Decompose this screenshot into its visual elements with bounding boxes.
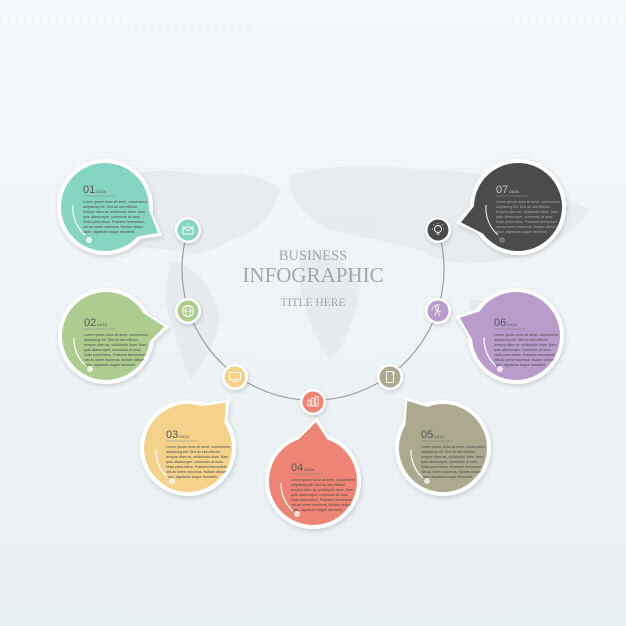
bubble 07: 07 xyxy=(496,184,508,196)
bubble 04: Nulla porta tellus. Praesent fermentum xyxy=(291,498,352,502)
icon 04: bar chart xyxy=(300,389,326,415)
arc connector xyxy=(182,230,444,400)
bubble 03: Lorem ipsum dolor sit amet, consectetur xyxy=(166,445,231,449)
bubble 06: adipiscing elit. Sed do sint efficitur xyxy=(494,338,549,342)
bubble 03: Nulla porta tellus. Praesent fermentum xyxy=(166,465,227,469)
title: TITLE HERE xyxy=(281,297,345,309)
bubble 01: DATA xyxy=(96,189,106,194)
bubble 03: adipiscing elit. Sed do sint efficitur xyxy=(166,450,221,454)
bubble 02: quis ullamcorper, commodo at nunc. xyxy=(84,348,142,352)
bubble 04: DATA xyxy=(304,467,314,472)
bubble 03 xyxy=(121,368,265,515)
bubble 02: Nulla porta tellus. Praesent fermentum xyxy=(84,353,145,357)
bubble 01: Lorem ipsum dolor sit amet, consectetur xyxy=(83,200,148,204)
bubble 05: quis ullamcorper, commodo at nunc. xyxy=(421,460,479,464)
bubble 07: tempus diam ac, sollicitudin diam. Nam xyxy=(496,210,558,214)
icon 01: envelope xyxy=(175,217,201,243)
bubble 05: Nulla porta tellus. Praesent fermentum xyxy=(421,465,482,469)
bubble 04: tempus diam ac, sollicitudin diam. Nam xyxy=(291,488,353,492)
bubble 02: nisl ac lorem maximus. Nullam dictum xyxy=(84,358,144,362)
bubble 02: tempus diam ac, sollicitudin diam. Nam xyxy=(84,343,146,347)
bubble 02: DATA xyxy=(97,322,107,327)
icon 07: light bulb xyxy=(425,217,451,243)
icon 06: person xyxy=(425,298,451,324)
world map background xyxy=(60,166,590,380)
bubble 05: diam, dignissim augue hendrerit. xyxy=(421,475,473,479)
bubble 06: Lorem ipsum dolor sit amet, consectetur xyxy=(494,333,559,337)
bubble 06: tempus diam ac, sollicitudin diam. Nam xyxy=(494,343,556,347)
bubble 02: Lorem ipsum dolor sit amet, consectetur xyxy=(84,333,149,337)
bubble 04: quis ullamcorper, commodo at nunc. xyxy=(291,493,349,497)
bubble 01: tempus diam ac, sollicitudin diam. Nam xyxy=(83,210,145,214)
bubble 03: diam, dignissim augue hendrerit. xyxy=(166,475,218,479)
bubble 04: Lorem ipsum dolor sit amet, consectetur xyxy=(291,478,356,482)
bubble 01: diam, dignissim augue hendrerit. xyxy=(83,230,135,234)
bubble 07: Nulla porta tellus. Praesent fermentum xyxy=(496,220,557,224)
bubble 02: 02 xyxy=(84,317,96,329)
bubble 03: 03 xyxy=(166,429,178,441)
bubble 03: DATA xyxy=(179,434,189,439)
bubble 07: diam, dignissim augue hendrerit. xyxy=(496,230,548,234)
title: INFOGRAPHIC xyxy=(242,263,384,287)
icon 03: monitor xyxy=(222,364,248,390)
title xyxy=(242,248,384,309)
bubble 02: adipiscing elit. Sed do sint efficitur xyxy=(84,338,139,342)
bubble 07: nisl ac lorem maximus. Nullam dictum xyxy=(496,225,556,229)
bubble 01: adipiscing elit. Sed do sint efficitur xyxy=(83,205,138,209)
bubble 07 xyxy=(442,147,578,272)
icon 02: globe xyxy=(175,298,201,324)
bubble 07: adipiscing elit. Sed do sint efficitur xyxy=(496,205,551,209)
title: BUSINESS xyxy=(279,248,347,264)
bubble 03: quis ullamcorper, commodo at nunc. xyxy=(166,460,224,464)
bubble 05: 05 xyxy=(421,429,433,441)
bubble 05: tempus diam ac, sollicitudin diam. Nam xyxy=(421,455,483,459)
bubble 04 xyxy=(265,417,361,529)
bubble 04: diam, dignissim augue hendrerit. xyxy=(291,508,343,512)
bubble 04: 04 xyxy=(291,462,303,474)
bubble 01: quis ullamcorper, commodo at nunc. xyxy=(83,215,141,219)
bubble 06: 06 xyxy=(494,317,506,329)
bubble 06: Nulla porta tellus. Praesent fermentum xyxy=(494,353,555,357)
bubble 03: nisl ac lorem maximus. Nullam dictum xyxy=(166,470,226,474)
bubble 05: nisl ac lorem maximus. Nullam dictum xyxy=(421,470,481,474)
bubble 07: quis ullamcorper, commodo at nunc. xyxy=(496,215,554,219)
bubble 01: Nulla porta tellus. Praesent fermentum xyxy=(83,220,144,224)
bubble 05: adipiscing elit. Sed do sint efficitur xyxy=(421,450,476,454)
bubble 01: nisl ac lorem maximus. Nullam dictum xyxy=(83,225,143,229)
bubble 05 xyxy=(365,368,511,516)
bubble 06: quis ullamcorper, commodo at nunc. xyxy=(494,348,552,352)
bubble 06: DATA xyxy=(507,322,517,327)
bubble 04: adipiscing elit. Sed do sint efficitur xyxy=(291,483,346,487)
bubble 07: DATA xyxy=(509,189,519,194)
bubble 01: 01 xyxy=(83,184,95,196)
bubble 06: nisl ac lorem maximus. Nullam dictum xyxy=(494,358,554,362)
bubble 05: DATA xyxy=(434,434,444,439)
bubble 03: tempus diam ac, sollicitudin diam. Nam xyxy=(166,455,228,459)
icon 05: phone xyxy=(377,364,403,390)
bubble 01 xyxy=(42,144,183,276)
bubble 05: Lorem ipsum dolor sit amet, consectetur xyxy=(421,445,486,449)
bubble 02 xyxy=(49,276,179,393)
bubble 06 xyxy=(442,273,575,395)
bubble 02: diam, dignissim augue hendrerit. xyxy=(84,363,136,367)
bubble 06: diam, dignissim augue hendrerit. xyxy=(494,363,546,367)
bubble 07: Lorem ipsum dolor sit amet, consectetur xyxy=(496,200,561,204)
bubble 04: nisl ac lorem maximus. Nullam dictum xyxy=(291,503,351,507)
